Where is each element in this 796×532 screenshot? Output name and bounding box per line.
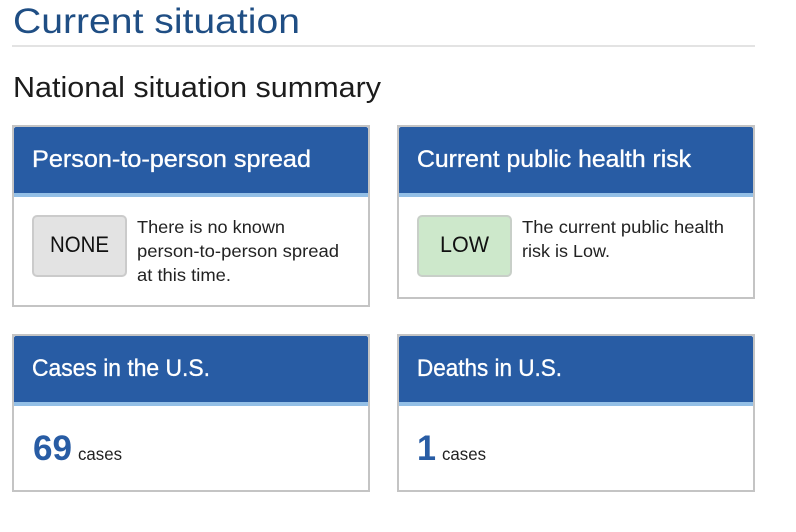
panel heading: Deaths in U.S. [417, 355, 562, 382]
panel: current public health risk [398, 126, 754, 298]
description text: at this time. [137, 265, 231, 285]
title: Current situation [13, 1, 300, 41]
description text: person-to-person spread [137, 241, 339, 261]
description text: risk is Low. [522, 241, 610, 261]
unit label: cases [78, 444, 122, 464]
description text: The current public health [522, 217, 724, 237]
panel: cases in the U.S. [13, 335, 369, 491]
status badge: none [33, 216, 126, 276]
description text [522, 217, 724, 261]
panel heading: Current public health risk [417, 146, 692, 173]
panel: person-to-person spread [13, 126, 369, 306]
case count: 69 [33, 429, 72, 468]
panel heading: Person-to-person spread [32, 146, 311, 173]
status badge: low [418, 216, 511, 276]
death count: 1 [417, 429, 436, 468]
panel: deaths in U.S. [398, 335, 754, 491]
status badge: none: NONE [50, 232, 109, 257]
panel heading: Cases in the U.S. [32, 355, 210, 382]
status badge: low: LOW [440, 232, 489, 257]
description text [137, 217, 339, 285]
unit label: cases [442, 444, 486, 464]
subheading: National situation summary [13, 72, 382, 104]
description text: There is no known [137, 217, 285, 237]
